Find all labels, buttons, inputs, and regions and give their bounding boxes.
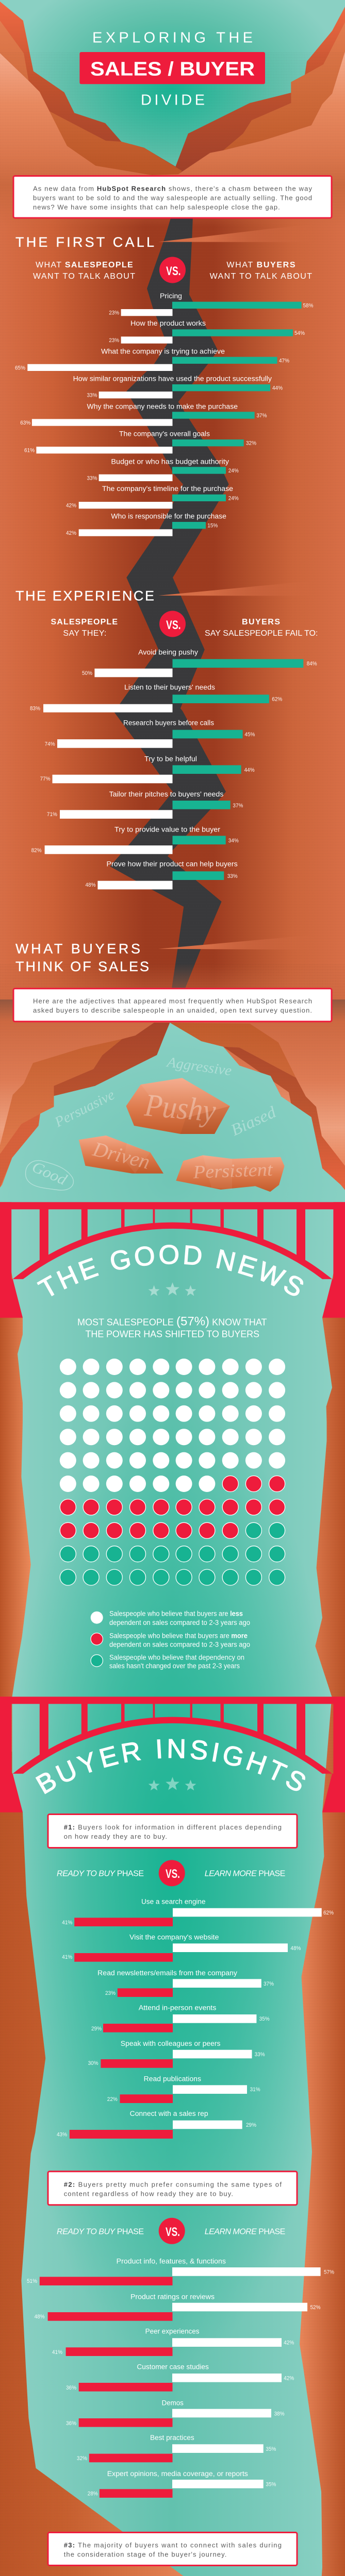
row: product info: Product info, features, & functions bbox=[117, 2257, 226, 2265]
row: customer case studies: 42% bbox=[284, 2376, 294, 2382]
row: attend in-person events: 29% bbox=[91, 2026, 102, 2032]
insight 2 phase headers: LEARN MORE PHASE bbox=[205, 2227, 285, 2236]
lower orange sides and teal column bbox=[0, 1206, 345, 2576]
row: demos: 38% bbox=[274, 2411, 285, 2417]
word: aggressive: Aggressive bbox=[165, 1054, 233, 1079]
first call column headers: WANT TO TALK ABOUT bbox=[33, 272, 135, 281]
row: demos bbox=[66, 2399, 285, 2427]
experience column headers: VS. bbox=[166, 618, 181, 632]
row: tailor their pitches to buyers' needs: Tailor their pitches to buyers' needs bbox=[109, 790, 224, 798]
row: avoid being pushy: 50% bbox=[82, 670, 92, 676]
row: why the company needs to make the purchase: 37% bbox=[257, 413, 267, 419]
row: use a search engine bbox=[62, 1898, 334, 1926]
insight 1 phase headers: VS. bbox=[166, 1867, 180, 1881]
experience column headers: BUYERS bbox=[242, 618, 280, 626]
row: who is responsible for the purchase: Who is responsible for the purchase bbox=[111, 513, 226, 520]
legend: no change: sales hasn't changed over the past 2-3 years bbox=[109, 1662, 240, 1670]
word: good in outlined blob: Good bbox=[29, 1158, 70, 1189]
first call column headers: WHAT BUYERS bbox=[226, 261, 295, 269]
legend bbox=[91, 1610, 250, 1670]
bar chart: where buyers look for information bbox=[57, 1898, 334, 2139]
row: how similar organizations have used the product successfully: How similar organizations have used the product successfully bbox=[73, 375, 272, 382]
row: product info: 51% bbox=[27, 2278, 37, 2284]
rock: persistent bbox=[176, 1155, 285, 1192]
insight 2 phase headers: READY TO BUY PHASE bbox=[57, 2227, 144, 2236]
experience column headers: SALESPEOPLE bbox=[51, 618, 118, 626]
row: visit the company's website: Visit the company's website bbox=[129, 1934, 219, 1941]
row: prove how their product can help buyers: Prove how their product can help buyers bbox=[106, 860, 238, 868]
row: how the product works: 23% bbox=[109, 337, 119, 344]
row: the company's timeline for the purchase: The company's timeline for the purchase bbox=[102, 485, 233, 493]
title bbox=[79, 29, 265, 108]
row: why the company needs to make the purchase: 63% bbox=[20, 420, 30, 426]
row: avoid being pushy: 84% bbox=[307, 661, 317, 667]
row: how similar organizations have used the product successfully bbox=[73, 375, 283, 399]
row: connect with a sales rep: 43% bbox=[57, 2132, 67, 2138]
rock: pushy bbox=[126, 1078, 230, 1134]
row: read publications: Read publications bbox=[144, 2075, 201, 2083]
row: what the company is trying to achieve bbox=[15, 348, 289, 371]
row: product info: 57% bbox=[324, 2269, 334, 2276]
row: attend in-person events: 35% bbox=[259, 2016, 270, 2022]
first call column headers: VS. bbox=[166, 264, 181, 278]
bar chart: content types bbox=[27, 2257, 334, 2498]
row: listen to their buyers' needs: 83% bbox=[30, 706, 40, 712]
row: research buyers before calls: 45% bbox=[244, 732, 255, 738]
row: attend in-person events: Attend in-person events bbox=[139, 2004, 217, 2012]
row: why the company needs to make the purchase: Why the company needs to make the purchase bbox=[87, 403, 238, 411]
row: what the company is trying to achieve: 47% bbox=[279, 358, 289, 364]
word: biased: Biased bbox=[228, 1102, 279, 1139]
row: use a search engine: Use a search engine bbox=[141, 1898, 205, 1906]
row: tailor their pitches to buyers' needs bbox=[47, 790, 243, 819]
row: how similar organizations have used the product successfully: 33% bbox=[87, 393, 97, 399]
heading: the good news: THE GOOD NEWS bbox=[37, 1245, 303, 1296]
white dots bbox=[60, 1359, 285, 1492]
row: research buyers before calls: 74% bbox=[45, 741, 55, 747]
bridge: the good news bbox=[0, 1202, 345, 1318]
row: read publications: 22% bbox=[107, 2096, 118, 2103]
row: the company's timeline for the purchase: 24% bbox=[228, 495, 239, 501]
title: SALES / BUYER bbox=[90, 59, 255, 80]
row: best practices: Best practices bbox=[150, 2434, 194, 2442]
row: speak with colleagues or peers: 30% bbox=[88, 2060, 98, 2066]
row: customer case studies bbox=[66, 2363, 294, 2392]
canyon header artwork bbox=[0, 0, 345, 999]
insight 1 phase headers bbox=[57, 1860, 285, 1886]
row: the company's overall goals: The company's overall goals bbox=[119, 430, 210, 438]
row: best practices: 35% bbox=[266, 2446, 276, 2452]
row: who is responsible for the purchase bbox=[66, 513, 226, 536]
row: avoid being pushy bbox=[82, 649, 317, 677]
heading: the experience: THE EXPERIENCE bbox=[15, 588, 154, 604]
legend: more dependent bbox=[91, 1632, 250, 1648]
insight 1 phase headers: LEARN MORE PHASE bbox=[205, 1870, 285, 1878]
intro callout bbox=[13, 176, 332, 218]
insight 1 callout bbox=[48, 1815, 297, 1848]
green dots bbox=[60, 1522, 285, 1585]
row: prove how their product can help buyers bbox=[86, 860, 238, 889]
row: budget or who has budget authority: 24% bbox=[228, 468, 239, 474]
row: how the product works bbox=[109, 319, 305, 344]
row: prove how their product can help buyers: 33% bbox=[227, 873, 238, 879]
heading wedges bbox=[0, 52, 345, 1030]
row: visit the company's website: 41% bbox=[62, 1954, 72, 1960]
row: product ratings or reviews: 52% bbox=[310, 2304, 321, 2311]
rock: pushy: Pushy bbox=[143, 1088, 218, 1129]
experience column headers: SAY THEY: bbox=[63, 629, 106, 638]
row: expert opinions: 28% bbox=[88, 2490, 98, 2497]
row: peer experiences: Peer experiences bbox=[145, 2327, 200, 2335]
statistic headline: MOST SALESPEOPLE (57%) KNOW THAT bbox=[77, 1315, 267, 1329]
row: pricing bbox=[109, 292, 314, 316]
first call column headers bbox=[33, 257, 312, 283]
insight 1 callout: #1: Buyers look for information in different places depending bbox=[64, 1823, 282, 1831]
insight 1 callout: on how ready they are to buy. bbox=[64, 1833, 167, 1840]
row: use a search engine: 62% bbox=[323, 1910, 334, 1916]
insight 2 phase headers bbox=[57, 2218, 285, 2244]
row: listen to their buyers' needs: Listen to their buyers' needs bbox=[124, 683, 215, 691]
survey callout bbox=[13, 989, 332, 1022]
first call column headers: WANT TO TALK ABOUT bbox=[210, 272, 312, 281]
row: how the product works: How the product works bbox=[130, 319, 206, 327]
legend: less dependent: dependent on sales compared to 2-3 years ago bbox=[109, 1619, 250, 1626]
row: expert opinions: Expert opinions, media coverage, or reports bbox=[107, 2470, 248, 2478]
row: budget or who has budget authority: Budget or who has budget authority bbox=[111, 457, 229, 465]
heading: what buyers think of sales bbox=[15, 941, 149, 974]
lower canyon artwork bbox=[0, 963, 345, 1208]
intro callout: news? We have some insights that can help salespeople close the gap. bbox=[33, 204, 280, 211]
row: use a search engine: 41% bbox=[62, 1920, 72, 1926]
row: attend in-person events bbox=[91, 2004, 270, 2032]
row: prove how their product can help buyers: 48% bbox=[86, 882, 96, 888]
row: try to be helpful: 44% bbox=[244, 767, 255, 773]
row: avoid being pushy: Avoid being pushy bbox=[138, 649, 198, 656]
stars bbox=[149, 1282, 196, 1296]
statistic headline: THE POWER HAS SHIFTED TO BUYERS bbox=[86, 1329, 259, 1339]
row: budget or who has budget authority: 33% bbox=[87, 475, 97, 481]
row: pricing: 58% bbox=[303, 303, 314, 309]
row: pricing: Pricing bbox=[160, 292, 182, 300]
survey callout: asked buyers to describe salespeople in an unaided, open text survey question. bbox=[33, 1007, 312, 1014]
row: read newsletters/emails from the company: 37% bbox=[264, 1981, 274, 1987]
row: product info bbox=[27, 2257, 334, 2285]
row: read publications bbox=[107, 2075, 260, 2103]
row: what the company is trying to achieve: 65% bbox=[15, 365, 25, 371]
insight 3 callout bbox=[48, 2533, 297, 2566]
insight 1 phase headers: READY TO BUY PHASE bbox=[57, 1870, 144, 1878]
row: listen to their buyers' needs bbox=[30, 683, 282, 713]
bar chart: the first call bbox=[15, 292, 314, 536]
row: best practices: 32% bbox=[77, 2455, 87, 2462]
row: customer case studies: Customer case studies bbox=[137, 2363, 209, 2370]
survey callout: Here are the adjectives that appeared most frequently when HubSpot Research bbox=[33, 997, 312, 1005]
row: speak with colleagues or peers: Speak with colleagues or peers bbox=[121, 2040, 221, 2047]
row: connect with a sales rep bbox=[57, 2110, 256, 2139]
row: expert opinions bbox=[88, 2470, 276, 2498]
row: tailor their pitches to buyers' needs: 71% bbox=[47, 811, 57, 818]
row: read newsletters/emails from the company bbox=[97, 1969, 274, 1997]
row: try to be helpful bbox=[40, 755, 255, 783]
row: the company's timeline for the purchase bbox=[66, 485, 239, 509]
legend: no change bbox=[91, 1654, 244, 1670]
row: visit the company's website: 48% bbox=[290, 1945, 301, 1952]
row: connect with a sales rep: 29% bbox=[246, 2122, 256, 2128]
insight 2 callout: #2: Buyers pretty much prefer consuming the same types of bbox=[64, 2180, 282, 2188]
row: how similar organizations have used the product successfully: 44% bbox=[272, 385, 283, 392]
row: expert opinions: 35% bbox=[266, 2481, 276, 2487]
intro callout: As new data from HubSpot Research shows, there's a chasm between the way bbox=[33, 185, 313, 193]
row: what the company is trying to achieve: What the company is trying to achieve bbox=[101, 348, 225, 355]
legend: more dependent: dependent on sales compared to 2-3 years ago bbox=[109, 1640, 250, 1648]
insight 3 callout: #3: The majority of buyers want to connect with sales during bbox=[64, 2541, 282, 2549]
row: who is responsible for the purchase: 42% bbox=[66, 530, 76, 536]
row: peer experiences bbox=[52, 2327, 294, 2356]
row: product ratings or reviews: 48% bbox=[35, 2314, 45, 2320]
title banner bbox=[79, 52, 265, 84]
row: pricing: 23% bbox=[109, 310, 119, 316]
row: tailor their pitches to buyers' needs: 37% bbox=[233, 803, 243, 809]
row: connect with a sales rep: Connect with a sales rep bbox=[130, 2110, 208, 2117]
row: who is responsible for the purchase: 15% bbox=[207, 523, 218, 529]
row: try to provide value to the buyer: 82% bbox=[31, 848, 42, 854]
word: persuasive: Persuasive bbox=[52, 1087, 117, 1131]
row: the company's overall goals: 32% bbox=[246, 440, 256, 447]
row: how the product works: 54% bbox=[294, 330, 305, 336]
row: best practices bbox=[77, 2434, 276, 2462]
rock: driven bbox=[79, 1136, 163, 1174]
dot grid: 100 salespeople bbox=[60, 1359, 285, 1585]
first call column headers: WHAT SALESPEOPLE bbox=[36, 261, 133, 269]
insight 2 phase headers: VS. bbox=[166, 2225, 180, 2239]
row: peer experiences: 41% bbox=[52, 2349, 62, 2355]
row: research buyers before calls bbox=[45, 719, 255, 748]
experience column headers bbox=[51, 611, 318, 638]
chasm between salespeople and buyers bbox=[110, 216, 229, 989]
row: customer case studies: 36% bbox=[66, 2385, 76, 2391]
row: budget or who has budget authority bbox=[87, 457, 239, 481]
rock: driven: Driven bbox=[90, 1137, 152, 1174]
row: visit the company's website bbox=[62, 1934, 301, 1962]
row: speak with colleagues or peers: 33% bbox=[255, 2052, 265, 2058]
row: speak with colleagues or peers bbox=[88, 2040, 265, 2068]
bar chart: the experience bbox=[30, 649, 317, 889]
row: product ratings or reviews bbox=[35, 2293, 321, 2321]
row: try to be helpful: 77% bbox=[40, 776, 51, 782]
row: listen to their buyers' needs: 62% bbox=[272, 697, 282, 703]
insight 3 callout: the consideration stage of the buyer's journey. bbox=[64, 2551, 226, 2558]
title: EXPLORING THE bbox=[92, 29, 253, 46]
row: try to provide value to the buyer: 34% bbox=[228, 838, 239, 844]
row: the company's overall goals: 61% bbox=[24, 448, 35, 454]
legend: less dependent: Salespeople who believe that buyers are less bbox=[109, 1610, 243, 1618]
experience column headers: SAY SALESPEOPLE FAIL TO: bbox=[205, 629, 318, 638]
intro callout: buyers want to be sold to and the way salespeople are actually selling. The good bbox=[33, 194, 312, 202]
row: read newsletters/emails from the company: Read newsletters/emails from the company bbox=[97, 1969, 237, 1977]
row: the company's timeline for the purchase: 42% bbox=[66, 503, 76, 509]
bridge: buyer insights bbox=[0, 1697, 345, 1812]
row: why the company needs to make the purchase bbox=[20, 403, 267, 426]
red dots bbox=[60, 1476, 285, 1538]
row: the company's overall goals bbox=[24, 430, 256, 454]
legend: less dependent bbox=[91, 1610, 250, 1626]
row: demos: Demos bbox=[162, 2399, 184, 2406]
row: demos: 36% bbox=[66, 2420, 76, 2427]
row: try to provide value to the buyer bbox=[31, 826, 239, 854]
row: product ratings or reviews: Product ratings or reviews bbox=[130, 2293, 215, 2301]
heading: buyer insights: BUYER INSIGHTS bbox=[35, 1739, 305, 1794]
heading: what buyers think of sales: THINK OF SALES bbox=[15, 959, 149, 974]
stars bbox=[149, 1777, 196, 1790]
row: read newsletters/emails from the company: 23% bbox=[105, 1990, 116, 1996]
row: read publications: 31% bbox=[250, 2087, 260, 2093]
insight 2 callout bbox=[48, 2172, 297, 2205]
rock: persistent: Persistent bbox=[192, 1159, 273, 1182]
title: DIVIDE bbox=[141, 92, 205, 108]
legend: no change: Salespeople who believe that dependency on bbox=[109, 1654, 244, 1662]
row: try to provide value to the buyer: Try to provide value to the buyer bbox=[114, 826, 221, 834]
heading: the first call: THE FIRST CALL bbox=[15, 234, 154, 250]
row: research buyers before calls: Research buyers before calls bbox=[123, 719, 214, 727]
row: peer experiences: 42% bbox=[284, 2340, 294, 2346]
statistic headline bbox=[77, 1315, 267, 1339]
insight 2 callout: content regardless of how ready they are to buy. bbox=[64, 2190, 233, 2197]
heading: what buyers think of sales: WHAT BUYERS bbox=[15, 941, 140, 957]
legend: more dependent: Salespeople who believe that buyers are more bbox=[109, 1632, 248, 1639]
row: try to be helpful: Try to be helpful bbox=[144, 755, 197, 762]
